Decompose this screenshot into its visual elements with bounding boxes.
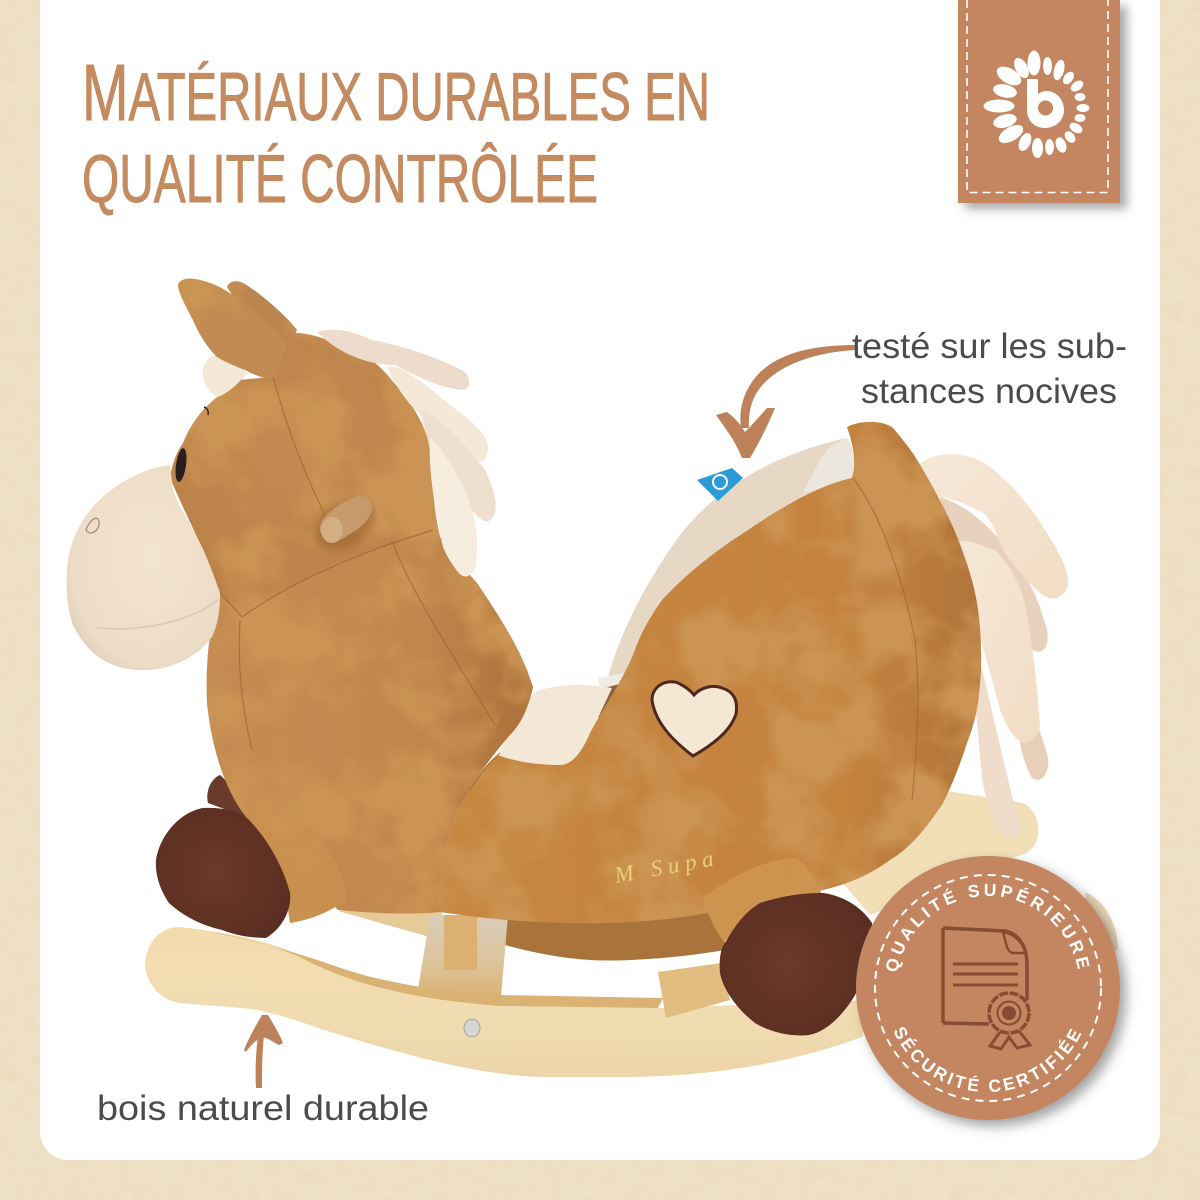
front leg — [249, 818, 346, 923]
seat cushion — [498, 685, 612, 765]
seams — [220, 377, 918, 800]
seal text top: QUALITÉ SUPÉRIEURE — [886, 884, 1090, 972]
arrow: to wood — [244, 1015, 283, 1088]
blue tag — [697, 468, 743, 501]
muzzle seam — [97, 600, 218, 629]
horse peg handle — [306, 490, 384, 560]
front body and head — [170, 333, 533, 913]
back ear — [227, 281, 297, 345]
rear block — [658, 963, 730, 1018]
far rocker — [338, 790, 1118, 961]
rear hoof — [720, 893, 872, 1035]
rear body — [440, 422, 981, 923]
label: harmful substances — [852, 327, 1127, 411]
seat back light panel — [803, 438, 854, 493]
icon: brand flower logo — [984, 50, 1090, 158]
front hoof — [156, 808, 290, 938]
arrow: to harmful substances label — [716, 345, 856, 458]
near rocker — [145, 927, 870, 1077]
label: natural wood: bois naturel durable — [97, 1089, 429, 1128]
front ear — [178, 279, 288, 380]
rocker screw — [464, 1019, 480, 1037]
front mane — [317, 330, 496, 576]
eye — [174, 447, 188, 483]
heart — [652, 682, 737, 756]
quality seal — [854, 854, 1134, 1134]
title: MATÉRIAUX DURABLES EN — [82, 48, 710, 137]
label: harmful substances: stances nocives — [861, 372, 1117, 411]
label: harmful substances: testé sur les sub- — [852, 327, 1127, 366]
title — [82, 48, 710, 217]
muzzle — [67, 465, 220, 670]
title: QUALITÉ CONTRÔLÉE — [82, 141, 598, 217]
center post — [418, 915, 508, 997]
seat interior — [597, 680, 635, 745]
tail — [917, 454, 1068, 838]
rear leg — [704, 858, 821, 942]
signature: M Supa — [612, 846, 715, 888]
eyelash — [204, 407, 208, 415]
icon: certificate — [943, 928, 1030, 1049]
brand tag — [958, 0, 1127, 209]
nostril — [86, 518, 99, 533]
seal text bottom: SÉCURITÉ CERTIFIÉE — [894, 1027, 1082, 1092]
seat back — [604, 438, 855, 705]
forehead tuft — [203, 355, 247, 397]
far front hoof — [207, 775, 246, 817]
seat strap — [598, 670, 640, 688]
rocking horse — [67, 279, 1118, 1077]
